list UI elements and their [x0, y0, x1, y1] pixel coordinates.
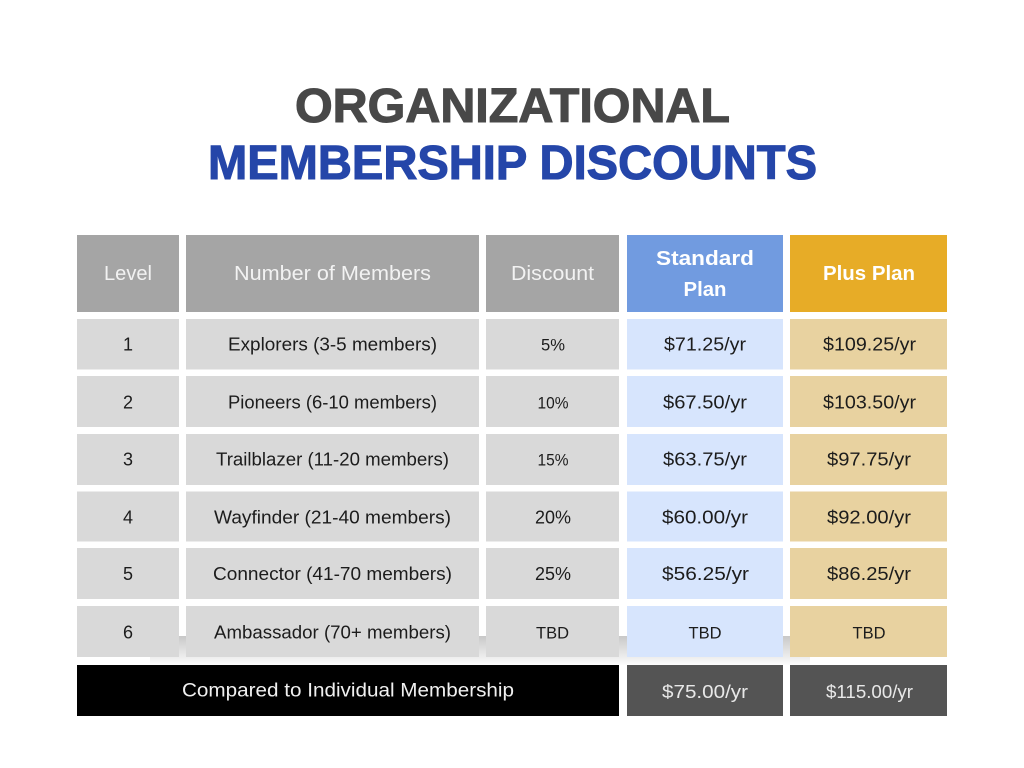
row 3: trailblazer [77, 434, 947, 485]
row 4: wayfinder: 4 [123, 508, 133, 528]
row 1: explorers: 5% [541, 336, 565, 354]
comparison row: individual membership: $115.00/yr [826, 682, 913, 702]
header: plus plan [790, 235, 947, 312]
row 5: connector: Connector (41-70 members) [213, 564, 452, 584]
row 5: connector: 25% [535, 564, 571, 584]
row 1: explorers: $109.25/yr [823, 334, 916, 354]
row 6: ambassador: 6 [123, 622, 133, 642]
row 4: wayfinder: 20% [535, 508, 571, 528]
comparison row: individual membership: $75.00/yr [662, 682, 748, 702]
row 4: wayfinder: $92.00/yr [827, 508, 911, 528]
shadow band behind last row [150, 636, 810, 665]
row 3: trailblazer: Trailblazer (11-20 members) [216, 450, 449, 470]
comparison row: individual membership: Compared to Individual Membership [182, 680, 514, 702]
header: level [77, 235, 179, 312]
row 4: wayfinder [77, 492, 947, 542]
row 2: pioneers: $103.50/yr [823, 392, 916, 412]
row 3: trailblazer: 3 [123, 450, 133, 470]
table header row [77, 235, 947, 312]
row 1: explorers [77, 319, 947, 370]
row 3: trailblazer: $97.75/yr [827, 450, 911, 470]
header: standard plan: Standard [656, 248, 754, 270]
header: number of members: Number of Members [234, 263, 431, 285]
header: standard plan: Plan [684, 279, 726, 301]
comparison row: individual membership [77, 665, 947, 716]
row 1: explorers: Explorers (3-5 members) [228, 334, 437, 354]
row 3: trailblazer: $63.75/yr [663, 450, 747, 470]
header: standard plan [627, 235, 783, 312]
header: number of members [186, 235, 479, 312]
header: discount: Discount [511, 263, 594, 285]
row 6: ambassador: TBD [688, 624, 722, 642]
row 2: pioneers: 2 [123, 392, 133, 412]
title: ORGANIZATIONAL [295, 80, 730, 133]
row 2: pioneers: 10% [538, 394, 569, 412]
row 1: explorers: $71.25/yr [664, 334, 746, 354]
row 2: pioneers [77, 376, 947, 427]
row 6: ambassador [77, 606, 947, 657]
title [208, 80, 817, 190]
row 1: explorers: 1 [123, 334, 133, 354]
row 5: connector: $86.25/yr [827, 564, 911, 584]
header: discount [486, 235, 619, 312]
title: MEMBERSHIP DISCOUNTS [208, 137, 817, 190]
row 4: wayfinder: Wayfinder (21-40 members) [214, 508, 451, 528]
row 2: pioneers: $67.50/yr [663, 392, 747, 412]
row 5: connector: 5 [123, 564, 133, 584]
row 6: ambassador: TBD [536, 624, 569, 642]
header: plus plan: Plus Plan [823, 263, 915, 285]
row 3: trailblazer: 15% [538, 452, 569, 470]
row 6: ambassador: TBD [852, 624, 886, 642]
row 5: connector [77, 548, 947, 599]
row 2: pioneers: Pioneers (6-10 members) [228, 392, 437, 412]
row 4: wayfinder: $60.00/yr [662, 508, 748, 528]
row 6: ambassador: Ambassador (70+ members) [214, 622, 451, 642]
row 5: connector: $56.25/yr [662, 564, 749, 584]
header: level: Level [104, 263, 152, 285]
